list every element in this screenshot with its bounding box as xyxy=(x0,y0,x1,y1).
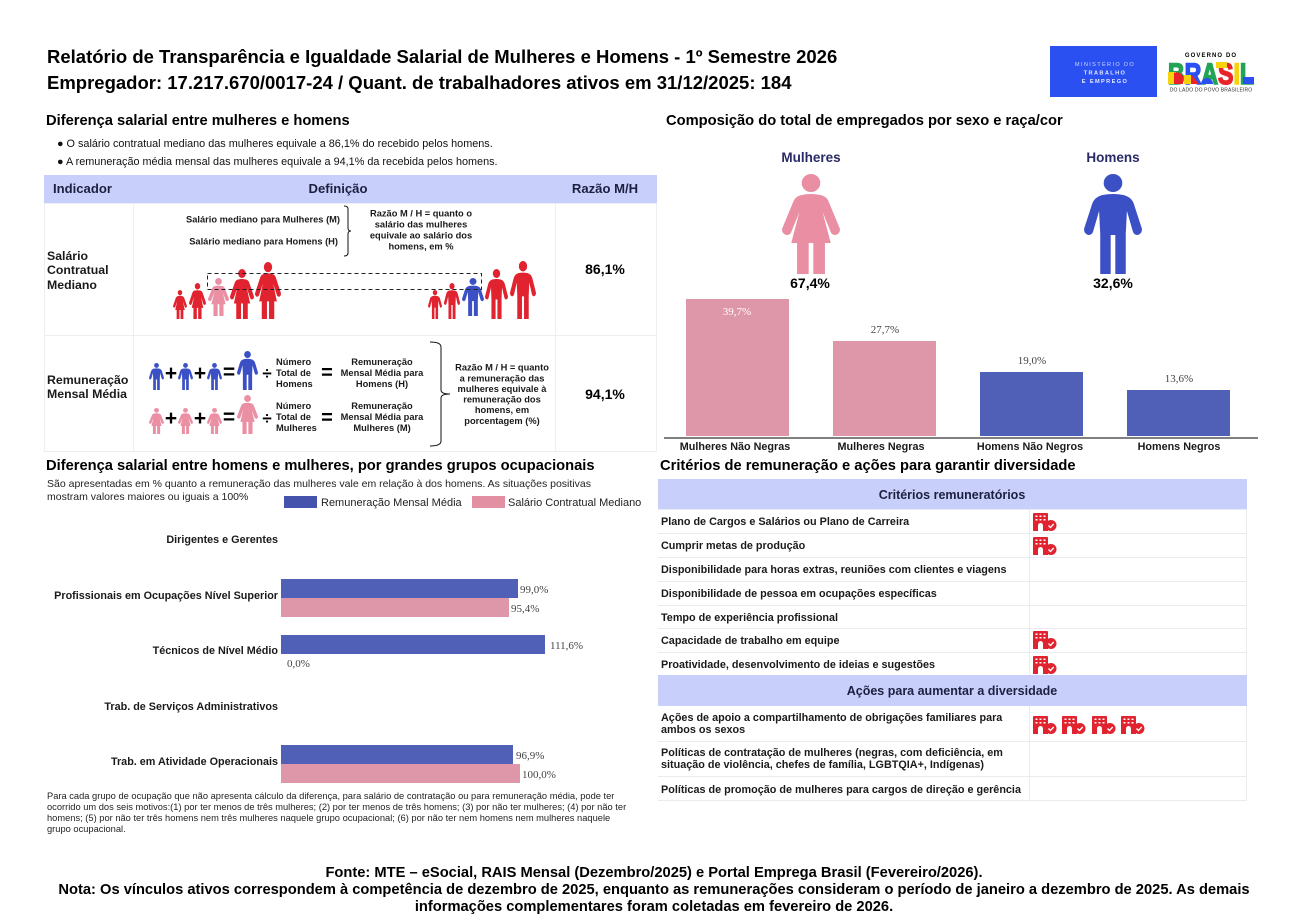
summary bullets: ● A remuneração média mensal das mulheres equivale a 94,1% da recebida pelos homens. xyxy=(57,156,498,168)
definition text: salário mediano xyxy=(186,206,472,256)
row value: 94,1%: 94,1% xyxy=(585,386,625,402)
title: Empregador: 17.217.670/0017-24 / Quant. de trabalhadores ativos em 31/12/2025: 184 xyxy=(47,72,792,93)
explanation: razão remuneração: porcentagem (%) xyxy=(464,416,540,426)
bar chart: composição por sexo e raça xyxy=(664,299,1258,453)
explanation: razão remuneração: mulheres equivale à xyxy=(458,384,547,394)
pictogram: homens: Homens xyxy=(1086,150,1140,165)
bar chart: grupos ocupacionais: Técnicos de Nível Médio xyxy=(153,645,278,657)
description: grupos ocupacionais: São apresentadas em % quanto a remuneração das mulheres vale em relação à dos homens. As situações positivas xyxy=(47,478,591,490)
logo: Governo do Brasil: GOVERNO DO xyxy=(1185,53,1237,59)
formula: mulheres: + xyxy=(165,407,177,430)
row label: salário contratual mediano: Mediano xyxy=(47,278,97,292)
panel: ações para diversidade: Ações para aumentar a diversidade xyxy=(847,684,1057,698)
explanation: razão remuneração: Razão M / H = quanto xyxy=(455,362,549,372)
formula: homens: + xyxy=(165,362,177,385)
formula: homens: Homens (H) xyxy=(356,379,408,389)
formula: homens: Total de xyxy=(276,368,311,378)
formula: homens: Homens xyxy=(276,379,313,389)
panel: ações para diversidade: Políticas de promoção de mulheres para cargos de direção e gerência xyxy=(661,784,1022,796)
heading: diferença salarial: Diferença salarial entre mulheres e homens xyxy=(46,113,350,129)
footer: fonte e nota: Nota: Os vínculos ativos correspondem à competência de dezembro de 2025, enquanto as remunerações consideram o período de janeiro a dezembro de 2025. As demais xyxy=(58,882,1250,898)
row label: remuneração mensal média: Remuneração xyxy=(47,373,129,387)
formula: homens: ÷ xyxy=(262,364,272,383)
bar chart: grupos ocupacionais xyxy=(54,534,583,783)
formula: mulheres: Número xyxy=(276,401,311,411)
formula: mulheres: Mensal Média para xyxy=(341,412,424,422)
footnote: grupos ocupacionais xyxy=(47,791,626,834)
formula: homens: = xyxy=(223,361,235,384)
icons: mediana mulheres xyxy=(173,262,281,319)
pictogram: mulheres: Mulheres xyxy=(781,150,841,165)
bar chart: composição por sexo e raça: 39,7% xyxy=(723,306,751,318)
explanation: razão remuneração: remuneração dos xyxy=(463,394,541,404)
bar chart: grupos ocupacionais: 100,0% xyxy=(522,769,556,781)
formula: mulheres: = xyxy=(223,406,235,429)
formula: mulheres xyxy=(149,395,424,434)
logo: Ministério do Trabalho e Emprego xyxy=(1050,46,1157,97)
footnote: grupos ocupacionais: ocorrido um dos seis motivos:(1) por ter menos de três mulheres; (2) por ter menos de três homens; (3) por não ter mulheres; (4) por não ter xyxy=(47,802,626,812)
formula: homens: = xyxy=(321,362,333,384)
title: Relatório de Transparência e Igualdade Salarial de Mulheres e Homens - 1º Semestre 2026 xyxy=(47,46,837,67)
pictogram: homens xyxy=(1084,150,1142,291)
title xyxy=(47,46,837,93)
panel: ações para diversidade: Políticas de contratação de mulheres (negras, com deficiência, em xyxy=(661,747,1003,759)
bar chart: composição por sexo e raça: 13,6% xyxy=(1165,373,1193,385)
formula: homens: Mensal Média para xyxy=(341,368,424,378)
bar chart: composição por sexo e raça: Homens Não Negros xyxy=(977,441,1083,453)
explanation: razão remuneração xyxy=(430,342,549,446)
legend xyxy=(284,496,641,509)
logo: Governo do Brasil: DO LADO DO POVO BRASILEIRO xyxy=(1170,88,1252,94)
explanation: razão remuneração: a remuneração das xyxy=(460,374,544,384)
bar chart: grupos ocupacionais: Trab. em Atividade Operacionais xyxy=(111,756,278,768)
table header: Definição xyxy=(309,181,367,196)
panel: critérios remuneratórios: Cumprir metas de produção xyxy=(661,540,806,552)
formula: homens: Remuneração xyxy=(351,357,413,367)
footer: fonte e nota: informações complementares foram coletadas em fevereiro de 2026. xyxy=(415,899,893,915)
definition text: salário mediano: Salário mediano para Homens (H) xyxy=(189,236,338,246)
icons: ações marcadas xyxy=(1033,716,1144,734)
footer: fonte e nota xyxy=(58,865,1250,915)
formula: mulheres: Mulheres xyxy=(276,423,317,433)
icons: mediana homens xyxy=(428,261,536,319)
logo: Ministério do Trabalho e Emprego: MINISTÉRIO DO xyxy=(1075,61,1135,68)
formula: mulheres: Mulheres (M) xyxy=(353,423,411,433)
row label: salário contratual mediano: Contratual xyxy=(47,263,108,277)
bar chart: composição por sexo e raça: 19,0% xyxy=(1018,355,1046,367)
bar chart: grupos ocupacionais: 96,9% xyxy=(516,750,544,762)
explanation: razão remuneração: homens, em xyxy=(475,405,529,415)
definition text: salário mediano: homens, em % xyxy=(388,242,454,252)
panel: critérios remuneratórios: Proatividade, desenvolvimento de ideias e sugestões xyxy=(661,659,935,671)
panel: ações para diversidade: situação de violência, chefes de família, LGBTQIA+, Indígenas) xyxy=(661,759,984,771)
table header: Indicador xyxy=(53,181,112,196)
panel: critérios remuneratórios: Plano de Cargos e Salários ou Plano de Carreira xyxy=(661,516,910,528)
bar chart: composição por sexo e raça: Mulheres Negras xyxy=(837,441,925,453)
definition text: salário mediano: Razão M / H = quanto o xyxy=(370,208,472,218)
bar chart: grupos ocupacionais: 95,4% xyxy=(511,603,539,615)
panel: critérios remuneratórios: Tempo de experiência profissional xyxy=(661,612,838,624)
formula: homens xyxy=(149,351,424,390)
panel: ações para diversidade: ambos os sexos xyxy=(661,724,745,736)
bar chart: grupos ocupacionais: Dirigentes e Gerentes xyxy=(166,534,278,546)
definition text: salário mediano: Salário mediano para Mulheres (M) xyxy=(186,214,340,224)
definition text: salário mediano: equivale ao salário dos xyxy=(370,230,472,240)
table header: Razão M/H xyxy=(572,181,638,196)
legend: Salário Contratual Mediano xyxy=(508,497,641,509)
panel: critérios remuneratórios xyxy=(658,479,1247,675)
row value: 86,1%: 86,1% xyxy=(585,261,625,277)
panel: critérios remuneratórios: Disponibilidade de pessoa em ocupações específicas xyxy=(661,588,937,600)
panel: tabela de indicadores xyxy=(44,175,657,452)
formula: mulheres: ÷ xyxy=(262,409,272,428)
bar chart: grupos ocupacionais: Profissionais em Ocupações Nível Superior xyxy=(54,590,279,602)
panel: critérios remuneratórios: Capacidade de trabalho em equipe xyxy=(661,635,839,647)
bar chart: grupos ocupacionais: Trab. de Serviços Administrativos xyxy=(104,701,278,713)
footnote: grupos ocupacionais: Para cada grupo de ocupação que não apresenta cálculo da diferença, para salário de contratação ou para remuneração média, pode ter xyxy=(47,791,614,801)
footnote: grupos ocupacionais: homens; (5) por não ter três homens nem três mulheres naquele grupo ocupacional; (6) por não ter nem homens nem mulheres naquele xyxy=(47,813,610,823)
description: grupos ocupacionais xyxy=(47,478,591,503)
pictogram: mulheres: 67,4% xyxy=(790,275,830,291)
footnote: grupos ocupacionais: grupo ocupacional. xyxy=(47,824,126,834)
table header xyxy=(53,181,638,196)
panel: critérios remuneratórios: Critérios remuneratórios xyxy=(879,488,1025,502)
logo: Ministério do Trabalho e Emprego: E EMPREGO xyxy=(1082,79,1128,85)
description: grupos ocupacionais: mostram valores maiores ou iguais a 100% xyxy=(47,491,248,503)
bar chart: composição por sexo e raça: Homens Negros xyxy=(1138,441,1220,453)
formula: homens: Número xyxy=(276,357,311,367)
icons: critérios marcados xyxy=(1033,513,1056,674)
formula: mulheres: + xyxy=(194,407,206,430)
bar chart: grupos ocupacionais: 99,0% xyxy=(520,584,548,596)
formula: homens: + xyxy=(194,362,206,385)
definition text: salário mediano: salário das mulheres xyxy=(375,220,467,230)
panel: ações para diversidade xyxy=(658,675,1247,800)
logo: Ministério do Trabalho e Emprego: TRABALHO xyxy=(1084,70,1126,76)
bar chart: composição por sexo e raça: 27,7% xyxy=(871,324,899,336)
row label: salário contratual mediano: Salário xyxy=(47,249,88,263)
pictogram: homens: 32,6% xyxy=(1093,275,1133,291)
legend: Remuneração Mensal Média xyxy=(321,497,463,509)
heading: grupos ocupacionais: Diferença salarial entre homens e mulheres, por grandes grupos ocupacionais xyxy=(46,458,595,474)
row label: salário contratual mediano xyxy=(47,249,108,292)
heading: composição: Composição do total de empregados por sexo e raça/cor xyxy=(666,113,1063,129)
panel: critérios remuneratórios: Disponibilidade para horas extras, reuniões com clientes e viagens xyxy=(661,564,1007,576)
panel: ações para diversidade: Ações de apoio a compartilhamento de obrigações familiares para xyxy=(661,712,1003,724)
summary bullets: ● O salário contratual mediano das mulheres equivale a 86,1% do recebido pelos homens. xyxy=(57,138,493,150)
pictogram: mulheres xyxy=(781,150,841,291)
row label: remuneração mensal média xyxy=(47,373,129,401)
formula: mulheres: = xyxy=(321,407,333,429)
row label: remuneração mensal média: Mensal Média xyxy=(47,387,127,401)
bar chart: grupos ocupacionais: 0,0% xyxy=(287,658,310,670)
formula: mulheres: Total de xyxy=(276,412,311,422)
summary bullets xyxy=(57,138,498,168)
formula: mulheres: Remuneração xyxy=(351,401,413,411)
footer: fonte e nota: Fonte: MTE – eSocial, RAIS Mensal (Dezembro/2025) e Portal Emprega Brasil (Fevereiro/2026). xyxy=(325,865,983,881)
bar chart: grupos ocupacionais: 111,6% xyxy=(550,640,583,652)
heading: critérios: Critérios de remuneração e ações para garantir diversidade xyxy=(660,458,1076,474)
bar chart: composição por sexo e raça: Mulheres Não Negras xyxy=(680,441,790,453)
logo: Governo do Brasil: BRASIL xyxy=(1168,58,1254,91)
